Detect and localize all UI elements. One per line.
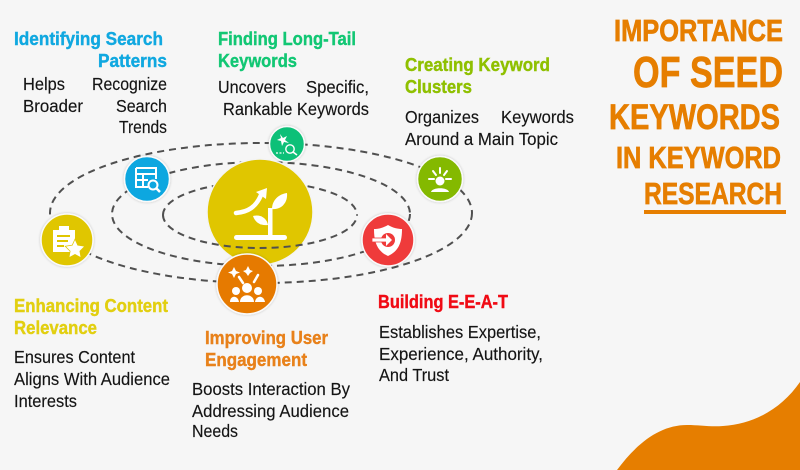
icon: red shield bbox=[362, 214, 414, 266]
block: creating keyword clusters: Clusters bbox=[405, 76, 472, 97]
icon: lime keyword cluster bbox=[418, 156, 462, 202]
block: building e-e-a-t bbox=[378, 291, 543, 385]
block: identifying search patterns: Identifying Search bbox=[14, 28, 163, 49]
central circle with plant icon bbox=[163, 159, 357, 265]
block: finding long-tail keywords: Specific, bbox=[306, 77, 369, 97]
block: identifying search patterns: Search bbox=[116, 96, 167, 116]
icon: orange audience engagement bbox=[217, 254, 277, 314]
block: identifying search patterns: Patterns bbox=[98, 50, 167, 71]
block: creating keyword clusters: Keywords bbox=[501, 107, 574, 127]
block: creating keyword clusters: Around a Main Topic bbox=[405, 129, 558, 149]
block: creating keyword clusters bbox=[405, 54, 574, 149]
dashed orbits bbox=[50, 143, 472, 283]
block: finding long-tail keywords bbox=[218, 28, 369, 119]
block: finding long-tail keywords: Rankable Keywords bbox=[223, 99, 369, 119]
decorative orange corner shape bbox=[617, 382, 800, 470]
block: improving user engagement: Improving User bbox=[205, 327, 328, 348]
block: enhancing content relevance: Enhancing Content bbox=[14, 295, 168, 316]
block: enhancing content relevance: Aligns With Audience bbox=[14, 369, 170, 389]
block: enhancing content relevance: Relevance bbox=[14, 317, 97, 338]
block: finding long-tail keywords: Keywords bbox=[218, 50, 297, 71]
block: building e-e-a-t: And Trust bbox=[379, 365, 449, 385]
block: enhancing content relevance: Interests bbox=[14, 391, 77, 411]
block: improving user engagement bbox=[192, 327, 350, 441]
title bbox=[609, 13, 786, 214]
block: identifying search patterns: Broader bbox=[23, 96, 83, 116]
block: creating keyword clusters: Creating Keyword bbox=[405, 54, 550, 75]
block: improving user engagement: Engagement bbox=[205, 349, 307, 370]
block: identifying search patterns: Recognize bbox=[92, 74, 167, 94]
block: enhancing content relevance bbox=[14, 295, 170, 411]
icon: green long-tail search bbox=[270, 126, 304, 162]
block: identifying search patterns: Helps bbox=[23, 74, 65, 94]
block: improving user engagement: Boosts Interaction By bbox=[192, 379, 350, 399]
block: identifying search patterns bbox=[14, 28, 167, 137]
block: building e-e-a-t: Experience, Authority, bbox=[379, 344, 543, 364]
block: enhancing content relevance: Ensures Content bbox=[14, 347, 135, 367]
block: building e-e-a-t: Establishes Expertise, bbox=[379, 322, 541, 342]
block: creating keyword clusters: Organizes bbox=[405, 107, 479, 127]
icon: yellow clipboard star bbox=[41, 214, 93, 266]
block: building e-e-a-t: Building E-E-A-T bbox=[378, 291, 509, 312]
icon: blue table search bbox=[124, 156, 170, 202]
block: finding long-tail keywords: Finding Long-Tail bbox=[218, 28, 356, 49]
block: finding long-tail keywords: Uncovers bbox=[218, 77, 286, 97]
block: identifying search patterns: Trends bbox=[119, 117, 167, 137]
block: improving user engagement: Needs bbox=[192, 421, 238, 441]
block: improving user engagement: Addressing Audience bbox=[192, 401, 349, 421]
